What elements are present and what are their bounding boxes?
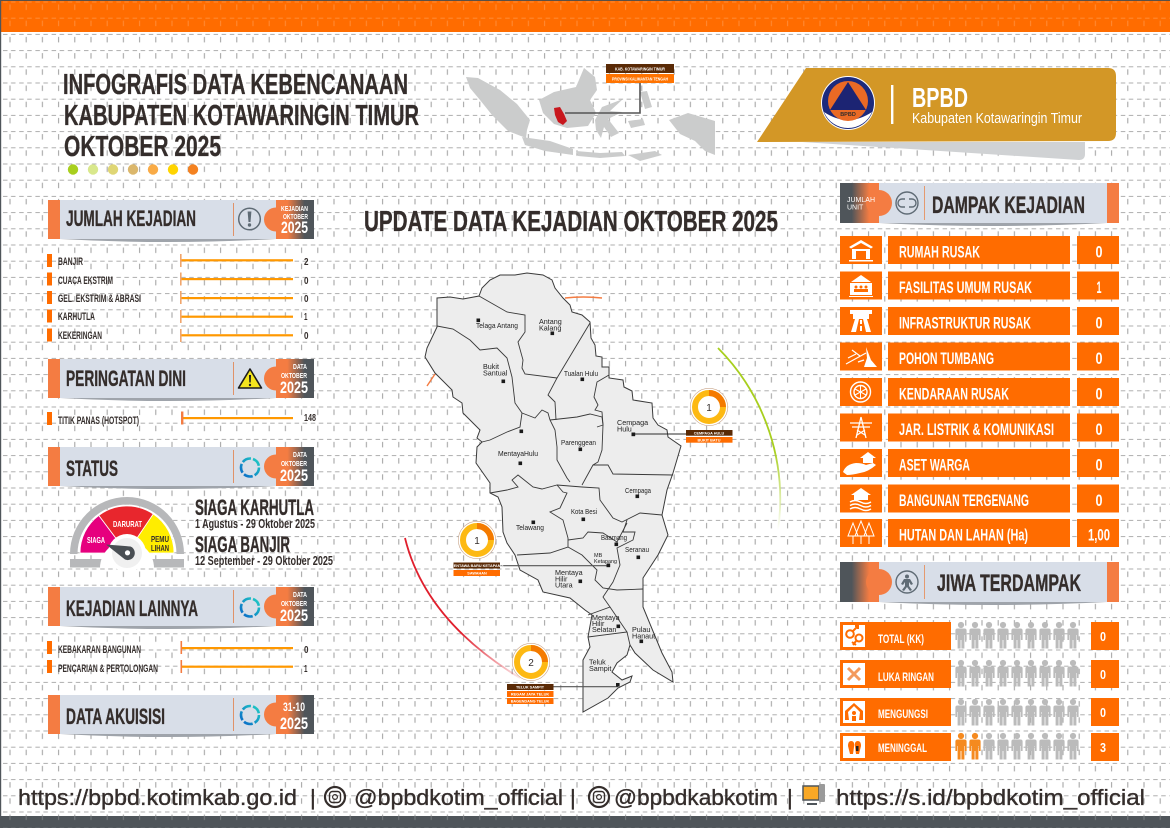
- section header: status: 2025: [280, 466, 308, 485]
- map labels: MB: [594, 553, 603, 559]
- footer links: @bpbdkotim_official: [354, 785, 563, 810]
- panel: pohon tumbang: 0: [1096, 349, 1102, 368]
- icon: wheel: [850, 382, 870, 402]
- map labels: Seranau: [625, 545, 649, 554]
- map labels: Pulau: [632, 625, 650, 634]
- gauge: [70, 497, 184, 572]
- chart: jumlah kejadian rows: GEL. EKSTRIM & ABRASI: [58, 293, 141, 305]
- panel: fasilitas umum rusak: 1: [1096, 278, 1102, 297]
- callout: mb ketapang: 1: [474, 536, 480, 547]
- section header: kejadian lainnya: [48, 587, 314, 629]
- district map: [425, 273, 681, 712]
- icon: ring: [241, 458, 259, 476]
- section header: peringatan dini: PERINGATAN DINI: [66, 366, 186, 391]
- icon: instagram: [589, 787, 609, 807]
- chart: jumlah kejadian rows: KARHUTLA: [58, 311, 95, 323]
- chart: kejadian lainnya rows: 0: [304, 644, 309, 656]
- title: KABUPATEN KOTAWARINGIN TIMUR: [64, 100, 419, 132]
- panel: rumah rusak: 0: [1096, 242, 1102, 262]
- map labels: Hanaut: [632, 632, 655, 640]
- panel: pohon tumbang: [840, 342, 1119, 370]
- BPBD banner: BPBD: [912, 82, 968, 113]
- icon: computer: [803, 784, 825, 805]
- map labels: Cempaga: [625, 486, 651, 495]
- section header: dampak kejadian: JUMLAH: [847, 197, 875, 204]
- section header: jumlah kejadian: JUMLAH KEJADIAN: [66, 206, 196, 231]
- colour dots: [68, 164, 198, 175]
- map labels: Ketapang: [594, 559, 617, 565]
- callout: cempaga hulu: 1: [706, 403, 712, 414]
- Indonesia locator map: KAB. KOTAWARINGIN TIMUR: [615, 66, 665, 72]
- decorative arc: green: [718, 348, 780, 530]
- icon: forest: [848, 521, 874, 544]
- panel: aset warga: ASET WARGA: [899, 456, 970, 474]
- Indonesia locator map: [466, 64, 715, 161]
- map labels: Parenggean: [561, 438, 596, 447]
- panel: fasilitas umum rusak: [840, 272, 1119, 300]
- panel: aset warga: [840, 449, 1119, 477]
- callout: cempaga hulu: [632, 388, 732, 443]
- section header: jumlah kejadian: KEJADIAN: [281, 204, 308, 213]
- status text: [195, 495, 333, 568]
- callout: teluk sampit: TELUK SAMPIT: [516, 686, 545, 690]
- chart: kejadian lainnya rows: PENCARIAN & PERTOLONGAN: [58, 663, 158, 675]
- map labels: Hulu: [617, 424, 632, 434]
- panel: total kk: 0: [1100, 629, 1106, 644]
- icon: broken chain: [896, 192, 918, 214]
- map labels: Santual: [483, 368, 508, 378]
- section header: dampak kejadian: [840, 183, 1119, 226]
- section header: kejadian lainnya: KEJADIAN LAINNYA: [66, 596, 198, 621]
- icon: ring: [241, 706, 259, 724]
- decorative arc: orange top: [565, 297, 602, 298]
- callout: mb ketapang: MENTAWA BARU KETAPANG: [451, 564, 503, 568]
- gauge: DARURAT: [113, 519, 143, 529]
- footer links: https://bpbd.kotimkab.go.id: [18, 785, 297, 810]
- footer links: @bpbdkabkotim: [614, 785, 778, 810]
- panel: jaringan listrik: 0: [1096, 420, 1102, 439]
- panel: pohon tumbang: POHON TUMBANG: [899, 349, 994, 368]
- bottom band: [0, 816, 1170, 828]
- chart: jumlah kejadian rows: 0: [304, 275, 309, 287]
- panel: infrastruktur rusak: 0: [1096, 314, 1102, 332]
- chart: jumlah kejadian rows: 0: [304, 293, 309, 305]
- section header: kejadian lainnya: DATA: [293, 590, 307, 599]
- panel: kendaraan rusak: KENDARAAN RUSAK: [899, 384, 1009, 404]
- panel: aset warga: 0: [1096, 456, 1102, 474]
- section header: status: [48, 447, 314, 489]
- map heading: UPDATE DATA KEJADIAN OKTOBER 2025: [364, 206, 778, 238]
- panel: kendaraan rusak: 0: [1096, 384, 1102, 404]
- section header: peringatan dini: 2025: [280, 378, 308, 397]
- panel: fasilitas umum rusak: FASILITAS UMUM RUSAK: [899, 278, 1032, 297]
- panel: rumah rusak: RUMAH RUSAK: [899, 242, 980, 262]
- panel: meninggal: MENINGGAL: [878, 741, 927, 755]
- section header: jumlah kejadian: OKTOBER: [283, 212, 308, 221]
- chart: jumlah kejadian rows: 2: [304, 256, 309, 268]
- panel: kendaraan rusak: [840, 378, 1119, 406]
- status text: 1 Agustus - 29 Oktober 2025: [195, 517, 315, 531]
- map labels: Kota Besi: [571, 507, 597, 516]
- decorative arc: orange left: [427, 374, 435, 386]
- pictogram row: [955, 733, 1079, 760]
- map labels: Mentaya: [555, 568, 583, 577]
- map labels: Kalang: [539, 324, 561, 332]
- icon: road: [850, 310, 872, 332]
- panel: bangunan tergenang: [840, 484, 1119, 512]
- pictogram row: [955, 699, 1079, 726]
- icon: bandage: [848, 668, 860, 680]
- panel: meninggal: [840, 733, 1119, 761]
- gauge: SIAGA: [87, 535, 105, 545]
- panel: meninggal: 3: [1100, 740, 1106, 755]
- icon: warning triangle: [238, 369, 262, 388]
- callout: cempaga hulu: BUKIT BATU: [698, 438, 721, 442]
- map labels: MentayaHulu: [498, 449, 538, 458]
- footer links: https://s.id/bpbdkotim_official: [836, 785, 1145, 810]
- callout: cempaga hulu: CEMPAGA HULU: [694, 431, 725, 435]
- chart: jumlah kejadian rows: 0: [304, 330, 309, 342]
- map labels: Baamang: [601, 533, 627, 542]
- callout: mb ketapang: SAWAHAN: [467, 572, 487, 576]
- map labels: Antang: [539, 317, 562, 326]
- section header: peringatan dini: DATA: [293, 362, 307, 371]
- map labels: Telaga Antang: [476, 321, 518, 330]
- icon: BPBD logo: BPBD: [840, 112, 856, 118]
- chart: kejadian lainnya rows: KEBAKARAN BANGUNAN: [58, 644, 141, 656]
- panel: luka ringan: LUKA RINGAN: [878, 670, 934, 684]
- icon: gender symbols: [846, 626, 862, 645]
- BPBD banner: Kabupaten Kotawaringin Timur: [912, 110, 1082, 127]
- panel: jaringan listrik: JAR. LISTRIK & KOMUNIKASI: [899, 420, 1054, 439]
- status text: 12 September - 29 Oktober 2025: [195, 554, 333, 568]
- map labels: Selatan: [592, 625, 616, 634]
- BPBD banner: [757, 68, 1116, 160]
- panel: bangunan tergenang: 0: [1096, 491, 1102, 510]
- icon: running person: [896, 571, 918, 593]
- section header: peringatan dini: OKTOBER: [281, 371, 307, 380]
- icon: house: [849, 240, 873, 262]
- map labels: Bukit: [483, 362, 499, 371]
- section header: kejadian lainnya: OKTOBER: [281, 599, 307, 608]
- map labels: Tualan Hulu: [564, 369, 598, 378]
- chart: kejadian lainnya rows: 1: [304, 663, 308, 675]
- chart: jumlah kejadian rows: CUACA EKSTRIM: [58, 275, 113, 287]
- chart: titik panas: TITIK PANAS (HOTSPOT): [58, 415, 139, 427]
- section header: data akuisisi: [48, 695, 314, 737]
- icon: fallen tree: [846, 350, 866, 364]
- panel: hutan dan lahan: 1,00: [1088, 526, 1110, 544]
- section header: jumlah kejadian: [48, 200, 314, 242]
- section header: status: OKTOBER: [281, 459, 307, 468]
- panel: infrastruktur rusak: INFRASTRUKTUR RUSAK: [899, 314, 1031, 332]
- icon: ring: [241, 598, 259, 616]
- footer links: [18, 784, 1145, 810]
- panel: total kk: [840, 622, 1119, 650]
- gauge: LIHAN: [151, 543, 169, 553]
- footer links: |: [310, 785, 316, 810]
- title: INFOGRAFIS DATA KEBENCANAAN: [63, 69, 408, 101]
- section header: peringatan dini: [48, 359, 314, 401]
- pictogram row: [955, 660, 1079, 686]
- panel: hutan dan lahan: HUTAN DAN LAHAN (Ha): [899, 526, 1028, 544]
- footer links: |: [787, 785, 793, 810]
- icon: power tower: [850, 417, 872, 438]
- section header: jumlah kejadian: 2025: [281, 218, 308, 237]
- map labels: Hilir: [555, 574, 568, 584]
- title: [63, 69, 419, 163]
- chart: jumlah kejadian rows: 1: [304, 311, 308, 323]
- section header: jiwa terdampak: [840, 562, 1119, 605]
- icon: hand with house: [843, 463, 876, 475]
- panel: mengungsi: MENGUNGSI: [878, 707, 928, 721]
- section header: status: DATA: [293, 450, 307, 459]
- icon: public building: [849, 275, 873, 297]
- panel: mengungsi: 0: [1100, 705, 1106, 720]
- panel: bangunan tergenang: BANGUNAN TERGENANG: [899, 491, 1029, 510]
- section header: dampak kejadian: DAMPAK KEJADIAN: [932, 192, 1085, 219]
- icon: exclamation: [239, 208, 260, 230]
- map labels: Telawang: [516, 523, 544, 532]
- chart: kejadian lainnya rows: [47, 641, 309, 675]
- map labels: Cempaga: [617, 418, 648, 427]
- chart: jumlah kejadian rows: BANJIR: [58, 256, 83, 268]
- map labels: Sampit: [589, 664, 611, 673]
- map labels: Teluk: [589, 658, 606, 666]
- icon: BPBD logo: [821, 76, 875, 130]
- icon: feet: [848, 741, 861, 754]
- section header: data akuisisi: 2025: [280, 714, 308, 733]
- map labels: [476, 317, 655, 673]
- pictogram row: [955, 622, 1079, 648]
- map labels: Hilir: [592, 619, 605, 628]
- panel: rumah rusak: [840, 236, 1119, 264]
- panel: infrastruktur rusak: [840, 307, 1119, 335]
- decorative arc: red: [405, 538, 520, 678]
- status text: SIAGA BANJIR: [195, 532, 290, 557]
- section header: status: STATUS: [66, 456, 118, 481]
- chart: jumlah kejadian rows: [47, 254, 309, 342]
- Indonesia locator map: PROVINSI KALIMANTAN TENGAH: [612, 76, 668, 82]
- chart: titik panas: 148: [304, 412, 316, 424]
- footer links: |: [570, 785, 576, 810]
- callout: teluk sampit: 2: [528, 658, 534, 669]
- status text: SIAGA KARHUTLA: [195, 495, 314, 520]
- section header: dampak kejadian: UNIT: [847, 204, 864, 212]
- chart: jumlah kejadian rows: KEKERINGAN: [58, 330, 102, 342]
- panel: jaringan listrik: [840, 414, 1119, 442]
- icon: sheltering hands: [845, 703, 863, 721]
- callout: teluk sampit: [507, 643, 620, 704]
- gauge: PEMU: [151, 534, 169, 544]
- section header: kejadian lainnya: 2025: [280, 606, 308, 625]
- panel: hutan dan lahan: [840, 519, 1119, 547]
- section header: jiwa terdampak: JIWA TERDAMPAK: [937, 570, 1081, 597]
- map labels: Utara: [555, 580, 573, 590]
- section header: data akuisisi: DATA AKUISISI: [66, 704, 165, 729]
- panel: total kk: TOTAL (KK): [878, 632, 924, 646]
- callout: mb ketapang: [451, 521, 610, 576]
- section header: data akuisisi: 31-10: [283, 700, 305, 714]
- panel: luka ringan: [840, 660, 1119, 688]
- callout: teluk sampit: BAGENDANG TELUK: [511, 700, 550, 704]
- map labels: Mentaya: [592, 613, 620, 622]
- icon: instagram: [325, 787, 345, 807]
- icon: flooded house: [851, 488, 871, 500]
- left edge line: [0, 0, 1, 828]
- panel: mengungsi: [840, 698, 1119, 726]
- chart: titik panas: [47, 412, 316, 427]
- panel: luka ringan: 0: [1100, 667, 1106, 682]
- callout: teluk sampit: REGAM JAYA TELUK: [511, 692, 549, 696]
- title: OKTOBER 2025: [64, 131, 221, 163]
- top band: [0, 0, 1170, 32]
